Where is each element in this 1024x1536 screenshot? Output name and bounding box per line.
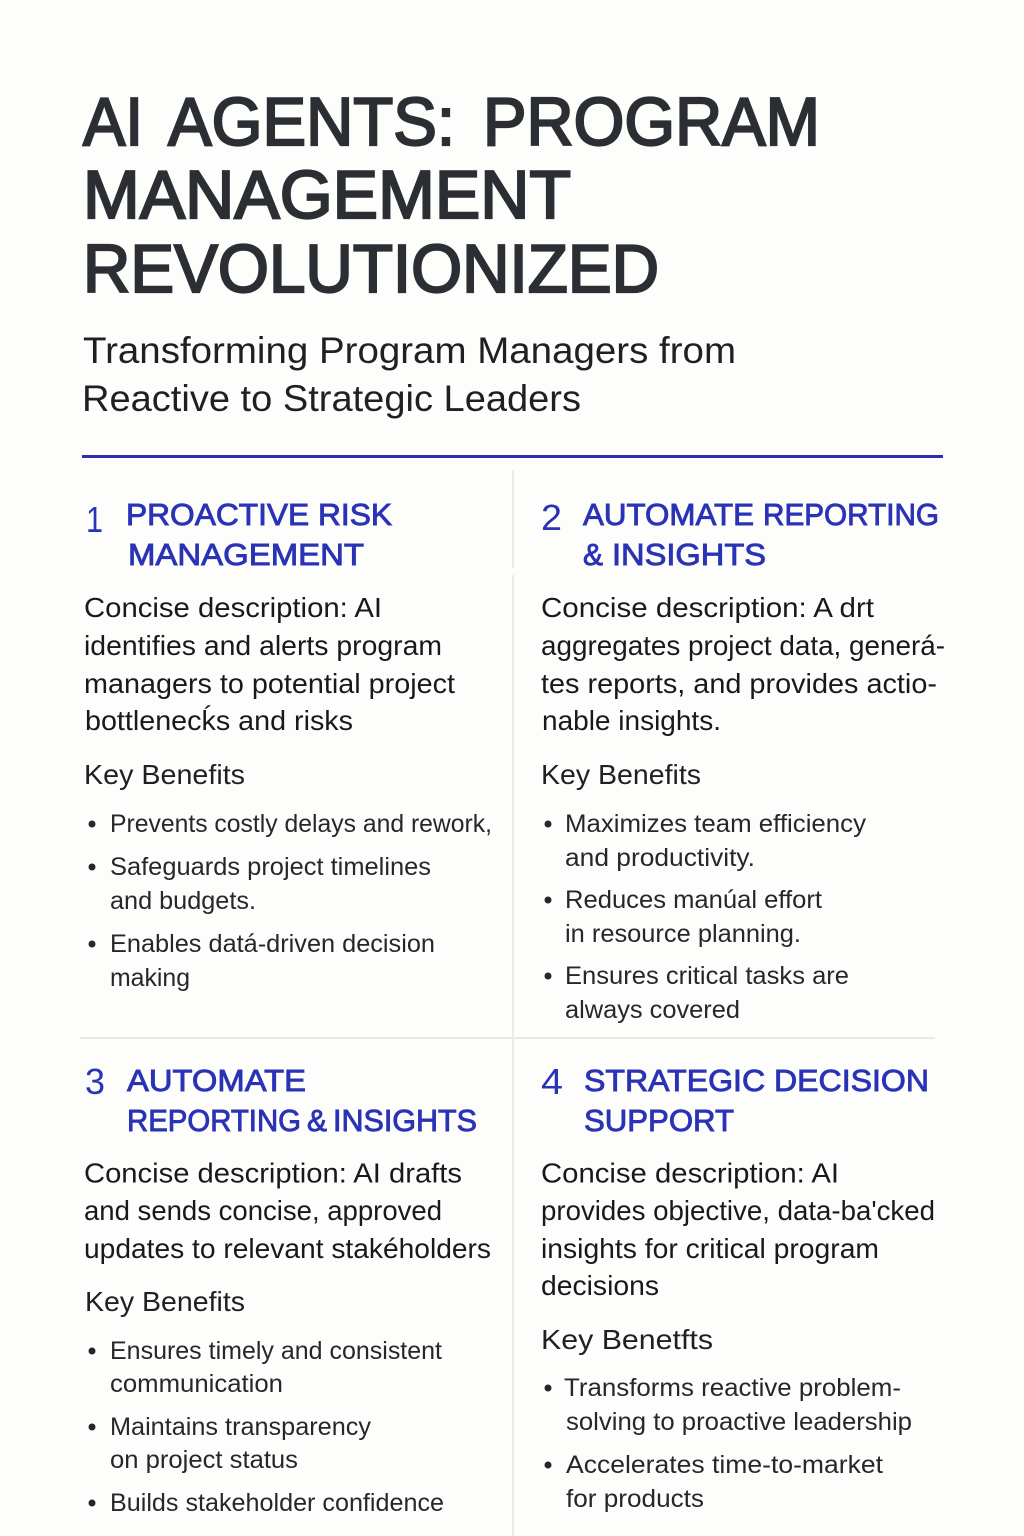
- benefits list 1: Safeguards project timelines: [110, 853, 431, 881]
- number 1: 1: [86, 499, 103, 540]
- key benefits label 1: Key Benefits: [84, 759, 245, 790]
- benefits list 3: on project status: [110, 1446, 298, 1474]
- benefits list 2: Reduces manúal effort: [565, 886, 822, 914]
- heading 2: INSIGHTS: [612, 537, 766, 572]
- heading 2: REPORTING: [763, 497, 939, 532]
- heading 3: [127, 1063, 477, 1138]
- description 3: updates to relevant stakéholders: [84, 1233, 491, 1264]
- description 1: identifies and alerts program: [84, 630, 442, 661]
- title: [83, 84, 820, 307]
- benefits list 2: [544, 810, 867, 1024]
- benefits list 1: and budgets.: [110, 887, 256, 915]
- heading 1: MANAGEMENT: [128, 537, 364, 572]
- description 2: Concise description: A drt: [541, 592, 874, 623]
- heading 4: STRATEGIC DECISION: [584, 1063, 929, 1098]
- number 4: 4: [541, 1061, 563, 1102]
- panel: strategic decision support: [541, 1061, 935, 1513]
- benefits list 4: [544, 1374, 912, 1513]
- panel: proactive risk management: [84, 497, 492, 992]
- description 1: managers to potential project: [84, 668, 455, 699]
- benefits list 4: for products: [566, 1485, 704, 1513]
- benefits list 1: [88, 810, 492, 992]
- panel: automate reporting and insights, stakeholders: [84, 1061, 491, 1517]
- title: REVOLUTIONIZED: [83, 231, 659, 307]
- title: PROGRAM: [483, 84, 820, 160]
- benefits list 3: communication: [110, 1370, 283, 1398]
- heading 4: SUPPORT: [584, 1103, 734, 1138]
- benefits list 4: Transforms reactive problem-: [564, 1374, 901, 1402]
- description 1: bottlenecḱs and risks: [85, 705, 353, 736]
- heading 3: AUTOMATE: [127, 1063, 306, 1098]
- key benefits label 3: Key Benefits: [85, 1286, 245, 1317]
- subtitle: Reactive to Strategic Leaders: [82, 378, 581, 419]
- description 3: and sends concise, approved: [84, 1195, 442, 1226]
- panel: automate reporting and insights: [541, 497, 945, 1024]
- benefits list 1: making: [110, 964, 190, 992]
- benefits list 3: Maintains transparency: [110, 1413, 371, 1441]
- number 3: 3: [85, 1061, 105, 1102]
- description 4: [541, 1158, 935, 1301]
- benefits list 2: always covered: [565, 996, 740, 1024]
- heading 2: [583, 497, 939, 572]
- key benefits label 2: Key Benefits: [541, 759, 701, 790]
- heading 3: &: [307, 1103, 327, 1138]
- description 4: decisions: [541, 1270, 659, 1301]
- heading 1: [126, 497, 392, 572]
- description 3: Concise description: AI drafts: [84, 1158, 462, 1188]
- description 2: nable insights.: [542, 705, 721, 736]
- description 3: [84, 1158, 491, 1264]
- description 4: provides objective, data-ba'cked: [541, 1195, 935, 1226]
- key benefits label 4: Key Benetfts: [541, 1324, 713, 1355]
- benefits list 3: Builds stakeholder confidence: [110, 1489, 444, 1517]
- description 1: [84, 592, 455, 736]
- title: AGENTS:: [168, 84, 455, 160]
- description 2: [541, 592, 945, 736]
- benefits list 1: Prevents costly delays and rework,: [110, 810, 492, 838]
- description 4: insights for critical program: [541, 1233, 879, 1264]
- heading 3: INSIGHTS: [333, 1103, 477, 1138]
- heading 3: REPORTING: [127, 1103, 301, 1138]
- description 1: Concise description: AI: [84, 592, 382, 623]
- description 2: tes reports, and provides actio-: [541, 668, 937, 699]
- benefits list 3: [88, 1337, 444, 1517]
- title: MANAGEMENT: [83, 157, 571, 233]
- benefits list 2: and productivity.: [565, 844, 755, 872]
- benefits list 4: solving to proactive leadership: [566, 1408, 912, 1436]
- benefits list 2: Ensures critical tasks are: [565, 962, 849, 990]
- benefits list 4: Accelerates time-to-market: [566, 1451, 883, 1479]
- subtitle: Transforming Program Managers from: [83, 330, 736, 371]
- number 2: 2: [541, 497, 562, 538]
- benefits list 2: Maximizes team efficiency: [565, 810, 867, 838]
- subtitle: [82, 330, 736, 419]
- heading 1: PROACTIVE RISK: [126, 497, 392, 532]
- benefits list 1: Enables datá-driven decision: [110, 930, 435, 958]
- heading 4: [584, 1063, 929, 1138]
- description 4: Concise description: AI: [541, 1158, 839, 1188]
- benefits list 3: Ensures timely and consistent: [110, 1337, 442, 1365]
- heading 2: &: [583, 537, 603, 572]
- benefits list 2: in resource planning.: [565, 920, 801, 948]
- description 2: aggregates project data, generá-: [541, 630, 945, 661]
- title: AI: [83, 84, 143, 160]
- heading 2: AUTOMATE: [583, 497, 754, 532]
